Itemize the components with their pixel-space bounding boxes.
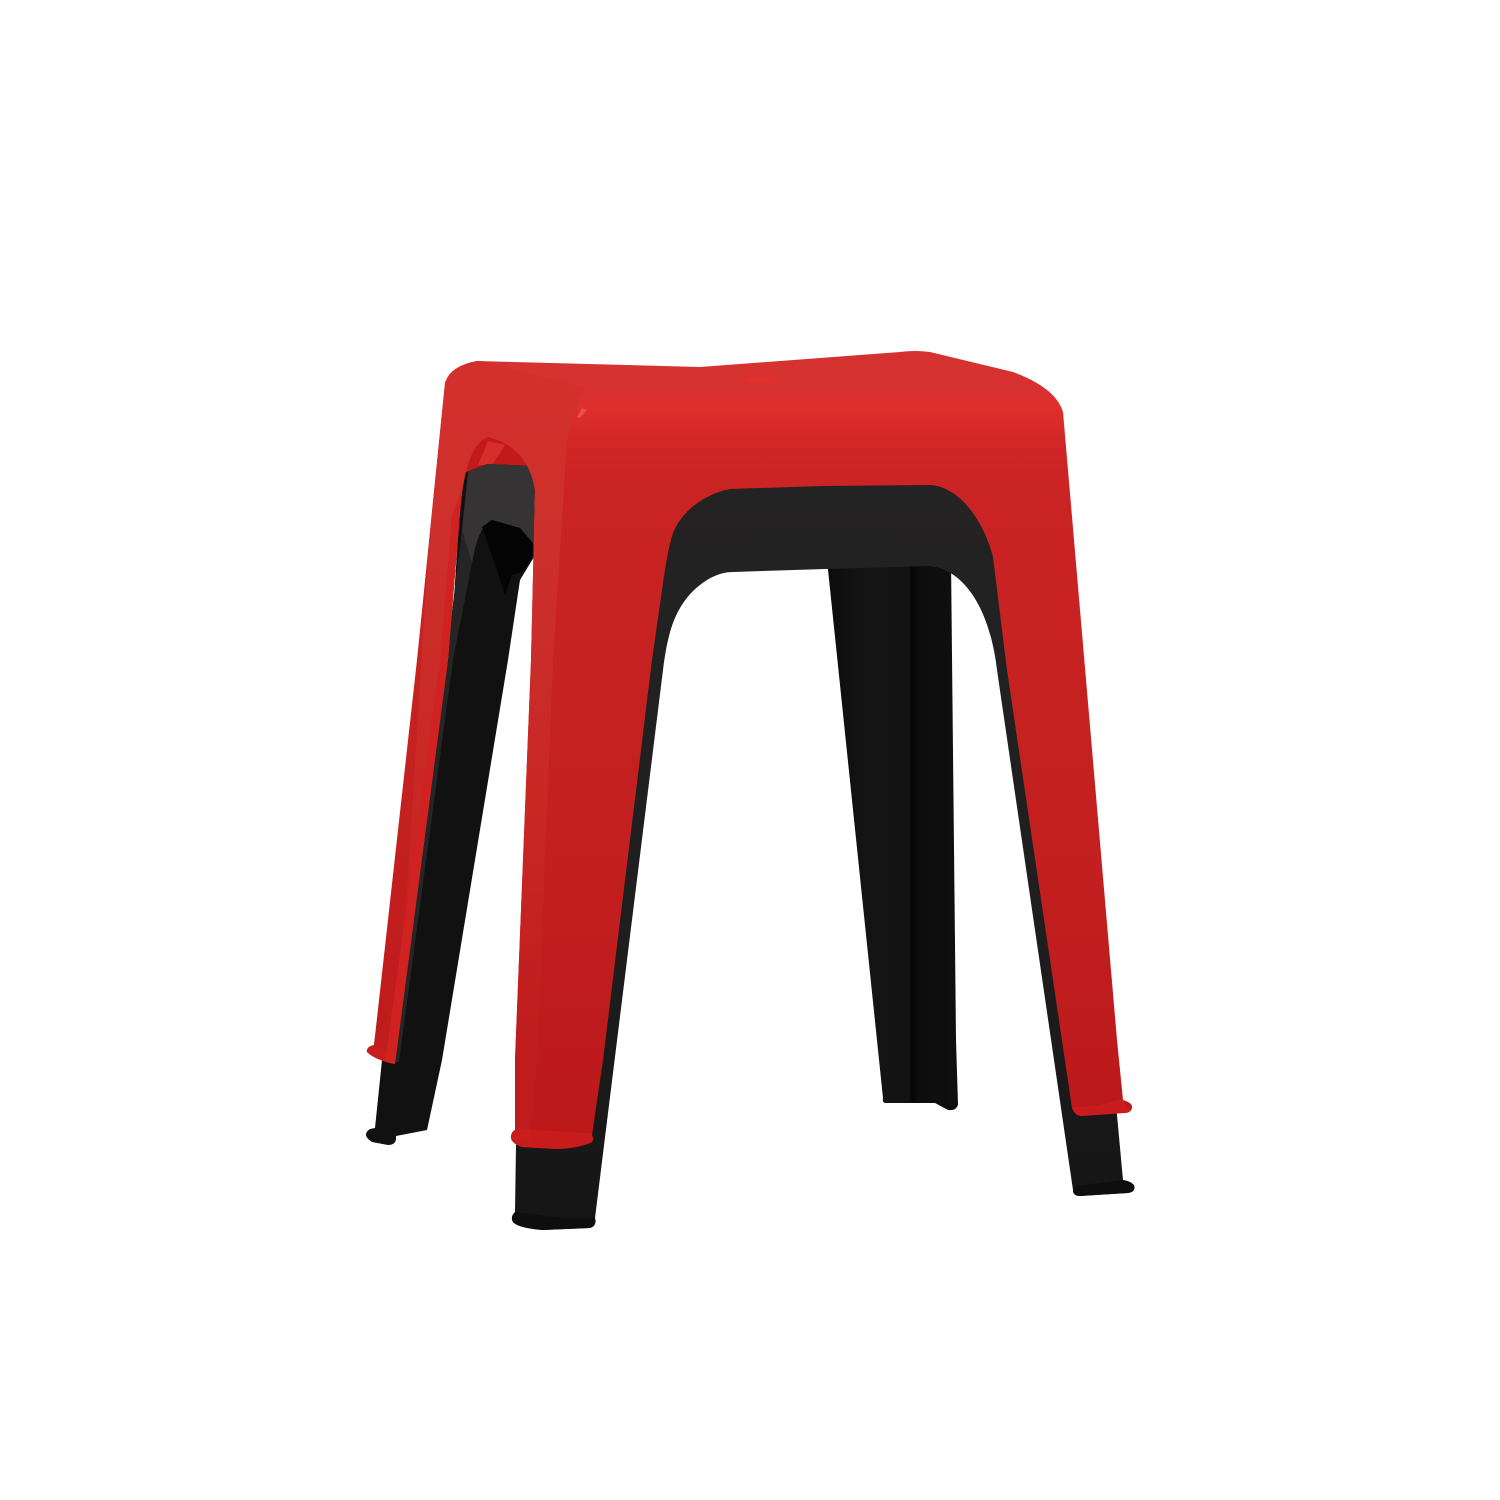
right front leg cuff xyxy=(1072,1099,1130,1116)
side leg inner shadow xyxy=(482,520,533,595)
seat corner highlight xyxy=(577,408,587,418)
underside of red seat seen through side arch xyxy=(458,432,538,520)
side face of red stool xyxy=(360,358,585,1140)
side leg grey edge strip xyxy=(392,530,472,1062)
black stool rear leg xyxy=(827,560,958,1110)
red stool body xyxy=(366,351,1132,1149)
rear left leg inner bright strip xyxy=(385,488,463,1064)
front left leg cuff xyxy=(510,1129,594,1149)
rear left leg cuff xyxy=(366,1046,396,1064)
black stool arch and front legs xyxy=(512,470,1134,1230)
side leg upper grey band xyxy=(462,464,535,563)
seat centre hole xyxy=(742,376,780,384)
black stool left side leg xyxy=(366,464,535,1145)
illustration: stacked stools xyxy=(366,351,1134,1230)
front foot cap xyxy=(512,1212,595,1230)
right foot cap xyxy=(1073,1180,1134,1196)
